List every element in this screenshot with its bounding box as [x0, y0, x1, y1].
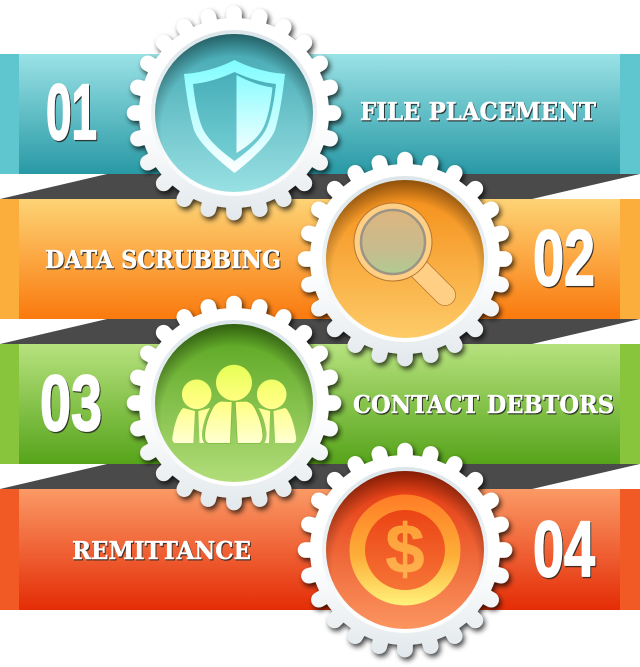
heading: remittance: REMITTANCE: [72, 536, 251, 565]
icon: three people: [172, 365, 296, 443]
icon: magnifying glass: [354, 203, 445, 295]
gear 3 with people: [134, 304, 334, 502]
heading: file placement: FILE PLACEMENT: [360, 97, 596, 126]
number 02: 02: [533, 213, 595, 302]
dark fold between bands 3 and 4: [0, 464, 640, 489]
number 03: 03: [40, 358, 102, 447]
band 4: remittance: [0, 489, 640, 610]
number 04: 04: [533, 504, 595, 593]
band 1: file placement: [0, 54, 640, 174]
heading: data scrubbing: DATA SCRUBBING: [45, 245, 281, 274]
dark fold between bands 2 and 3: [0, 319, 640, 344]
band 2: data scrubbing: [0, 199, 640, 319]
icon: shield: [184, 60, 285, 173]
icon: dollar coin: $: [386, 510, 424, 588]
number 01: 01: [46, 67, 97, 156]
band 3: contact debtors: [0, 344, 640, 464]
heading: contact debtors: CONTACT DEBTORS: [353, 390, 614, 419]
gear 4 with dollar coin: [306, 450, 504, 650]
dark fold between bands 1 and 2: [0, 174, 640, 199]
icon: dollar coin: [350, 494, 460, 606]
gear 2 with magnifying glass: [306, 160, 504, 358]
gear 1 with shield: [134, 14, 334, 212]
